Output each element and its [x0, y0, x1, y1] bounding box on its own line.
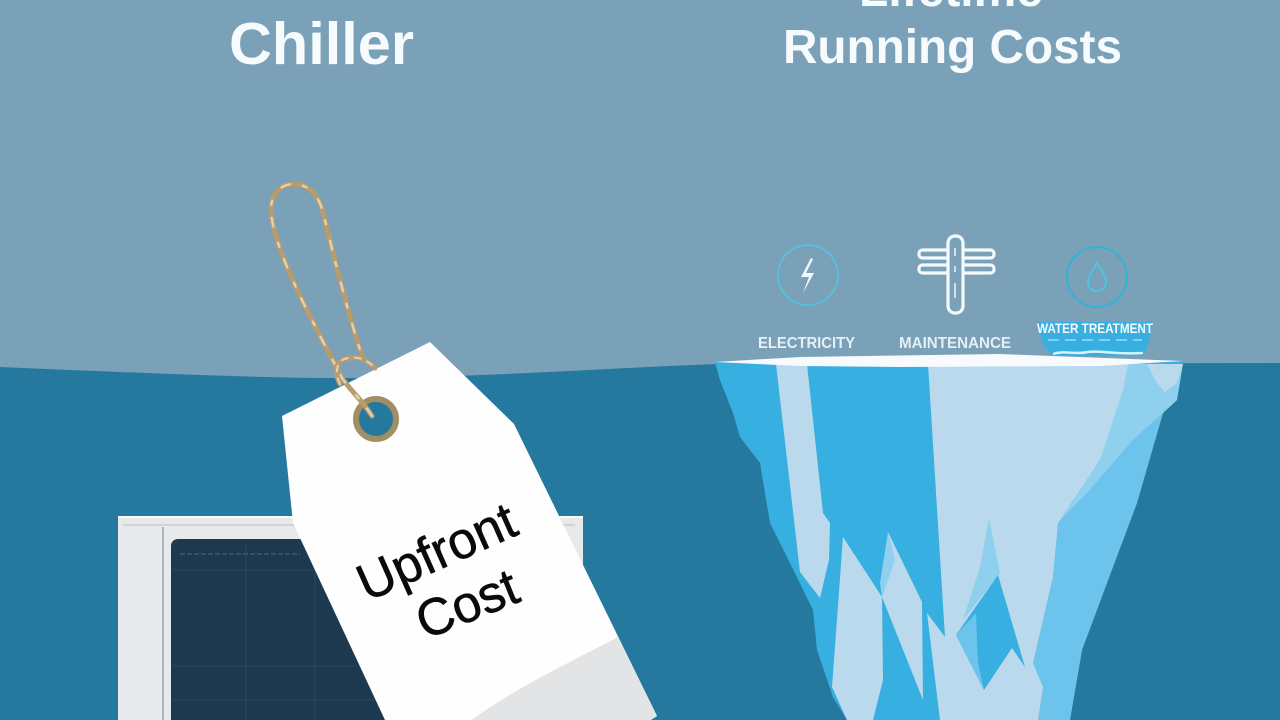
- chiller unit: [118, 517, 583, 720]
- tag text: Upfront Cost: Cost: [408, 558, 527, 651]
- diamond left facet: [956, 613, 984, 690]
- tag text: Upfront Cost: Upfront: [348, 491, 526, 613]
- water tank icon: [1037, 320, 1153, 356]
- iceberg white top surface: [715, 354, 1183, 367]
- tag eyelet: [356, 399, 396, 439]
- lower left light shard: [832, 537, 883, 720]
- rope loop: [271, 184, 375, 416]
- inner medium sliver: [963, 518, 1000, 620]
- label: maintenance: MAINTENANCE: [899, 335, 1011, 352]
- tank label: WATER TREATMENT: [1037, 320, 1153, 336]
- tank body: [1037, 322, 1153, 356]
- heading: Chiller: Chiller: [229, 11, 414, 77]
- small medium sliver: [880, 532, 895, 597]
- label: electricity: ELECTRICITY: [758, 335, 855, 352]
- price tag: [282, 342, 657, 720]
- icon: maintenance pipe: [919, 236, 994, 313]
- tag body: [282, 342, 657, 720]
- inner blue diamond: [956, 575, 1025, 690]
- iceberg body: [715, 362, 1183, 720]
- left light strip: [776, 364, 830, 598]
- chiller casing: [118, 517, 583, 720]
- upper right facet: [1058, 364, 1183, 523]
- lower middle light shard: [882, 532, 923, 700]
- iceberg: [715, 362, 1183, 720]
- top right corner facet: [1147, 364, 1183, 392]
- icon: water drop: [1067, 247, 1127, 307]
- right lower facet: [1033, 413, 1163, 720]
- tag lower grey band: [458, 637, 657, 720]
- chiller dark grille panel: [171, 539, 571, 720]
- background: water below waterline: [0, 363, 1280, 720]
- main light facet: [927, 364, 1128, 720]
- icon: electricity: [778, 245, 838, 305]
- heading: Lifetime Running Costs: Running Costs: [783, 21, 1122, 74]
